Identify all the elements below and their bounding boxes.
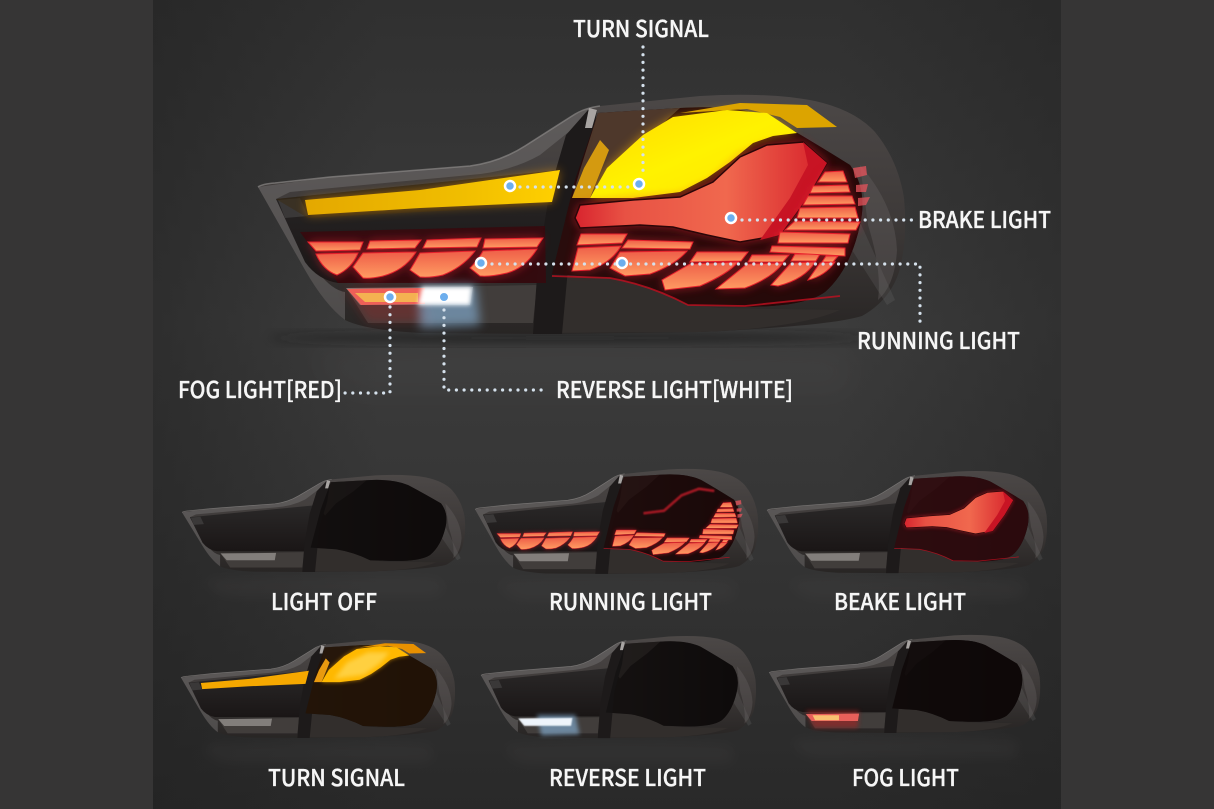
thumbnail: turn signal (181, 640, 455, 763)
marker dots (385, 179, 736, 302)
reverse and fog lens glow (347, 285, 480, 328)
caption: running light: RUNNING LIGHT (549, 583, 712, 617)
thumbnail: running light (475, 469, 758, 601)
running light fins (308, 166, 870, 290)
callout label: reverse light: REVERSE LIGHT[WHITE] (556, 371, 793, 405)
callout label: running light: RUNNING LIGHT (857, 322, 1020, 356)
caption: reverse light: REVERSE LIGHT (549, 759, 706, 793)
caption: brake light: BEAKE LIGHT (834, 583, 966, 617)
dotted connector lines (345, 47, 920, 393)
caption: fog light: FOG LIGHT (852, 759, 959, 793)
thumbnail: fog light (769, 635, 1040, 758)
thumbnail: brake light (767, 471, 1047, 599)
brake light glow (575, 142, 827, 242)
callout label: brake light: BRAKE LIGHT (918, 201, 1051, 235)
callout label: fog light: FOG LIGHT[RED] (178, 371, 342, 405)
caption: turn signal: TURN SIGNAL (268, 759, 405, 793)
main tail light (258, 95, 905, 395)
caption: light off: LIGHT OFF (271, 583, 377, 617)
thumbnail: reverse light (481, 636, 756, 764)
left and right turn-signal glow (305, 103, 837, 215)
callout label: turn signal: TURN SIGNAL (573, 10, 709, 44)
thumbnail: light off (182, 475, 465, 597)
